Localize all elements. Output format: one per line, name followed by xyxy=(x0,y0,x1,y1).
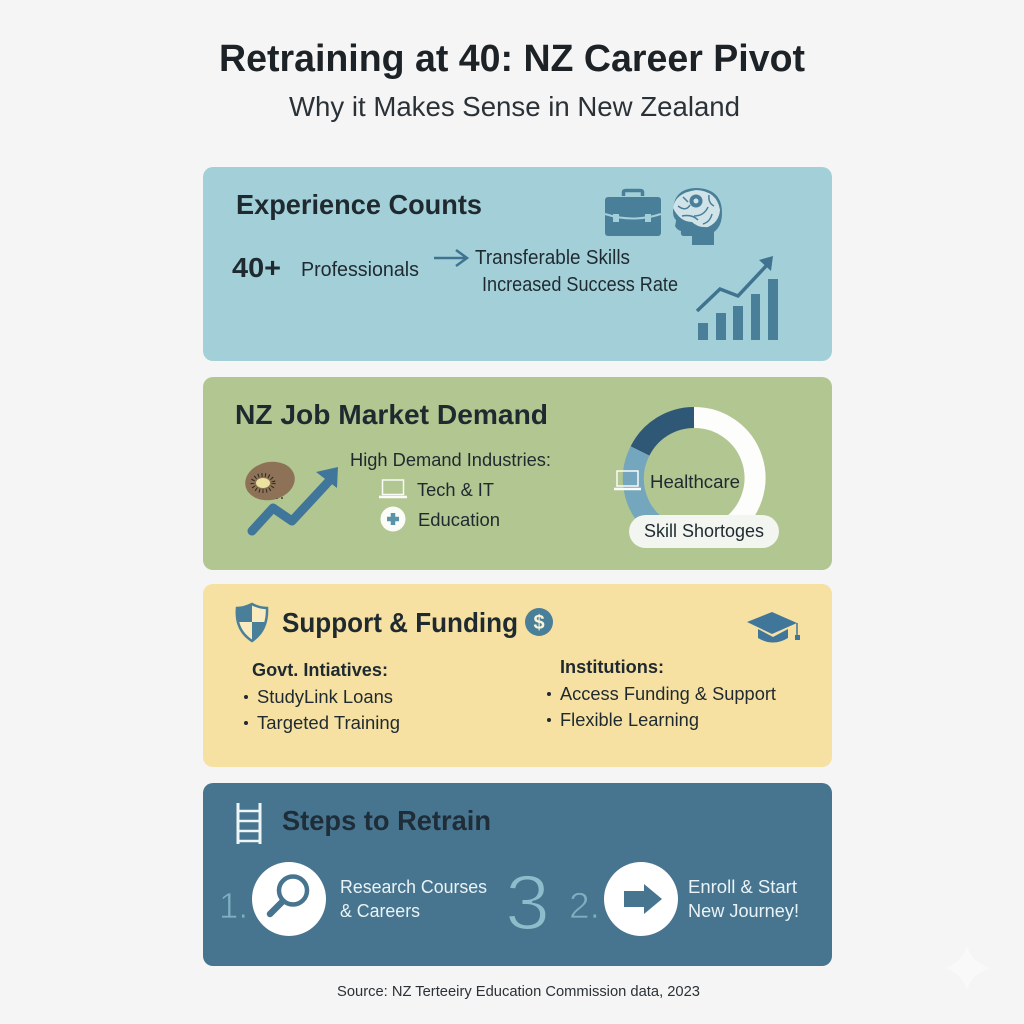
list: institutions: Institutions: xyxy=(560,656,664,677)
icon: kiwifruit xyxy=(242,457,298,505)
donut chart xyxy=(633,417,755,527)
icon: laptop small xyxy=(614,471,641,489)
list: government initiatives: StudyLink Loans xyxy=(257,686,393,707)
pill: skill shortages: Skill Shortoges xyxy=(644,520,764,541)
list: government initiatives: Targeted Training xyxy=(257,712,400,733)
label: research courses: & Careers xyxy=(340,900,420,921)
label: enroll and start xyxy=(688,876,799,921)
label: professionals: Professionals xyxy=(301,259,419,281)
step number 1: 1. xyxy=(219,885,248,926)
bar chart: rising success xyxy=(697,256,778,340)
label: enroll and start: Enroll & Start xyxy=(688,876,797,897)
arrow: professionals to skills xyxy=(434,250,467,266)
pill: skill shortages xyxy=(629,515,779,548)
list: institutions: Access Funding & Support xyxy=(560,683,776,704)
heading: job market: NZ Job Market Demand xyxy=(235,399,548,430)
list: government initiatives: Govt. Intiatives: xyxy=(252,659,388,680)
arrow: rising demand xyxy=(252,467,338,531)
panel: job market demand xyxy=(203,377,832,570)
label: transferable skills: Transferable Skills xyxy=(475,247,630,269)
heading: experience counts: Experience Counts xyxy=(236,189,482,220)
label: education: Education xyxy=(418,509,500,530)
icon: briefcase xyxy=(605,190,661,236)
panel: steps to retrain xyxy=(203,783,832,966)
label: research courses xyxy=(340,876,487,921)
step number 2: 2. xyxy=(569,885,600,926)
list: institutions: Flexible Learning xyxy=(560,709,699,730)
list: government initiatives xyxy=(244,659,400,733)
heading: steps: Steps to Retrain xyxy=(282,805,491,836)
label: tech and it: Tech & IT xyxy=(417,479,494,500)
icon: head with brain xyxy=(673,188,722,245)
icon: laptop xyxy=(379,480,407,497)
icon: ladder xyxy=(238,803,260,844)
list: institutions xyxy=(547,656,776,730)
label: increased success rate: Increased Success Rate xyxy=(482,274,678,296)
heading: support: Support & Funding xyxy=(282,607,518,638)
label: enroll and start: New Journey! xyxy=(688,900,799,921)
step number 3: 3 xyxy=(505,858,550,946)
title: Retraining at 40: NZ Career Pivot xyxy=(219,38,805,80)
label: research courses: Research Courses xyxy=(340,876,487,897)
label: healthcare: Healthcare xyxy=(650,471,740,492)
icon: dollar coin: $ xyxy=(533,612,545,634)
icon: medical plus xyxy=(380,506,406,532)
icon: forward arrow xyxy=(604,862,678,936)
subtitle: Why it Makes Sense in New Zealand xyxy=(289,91,740,122)
label: high demand industries: High Demand Industries: xyxy=(350,449,551,470)
icon: magnifier xyxy=(252,862,326,936)
panel: support and funding xyxy=(203,584,832,767)
label: 40+: 40+ xyxy=(232,252,281,283)
icon: dollar coin xyxy=(525,608,553,636)
panel: experience counts xyxy=(203,167,832,361)
source note: Source: NZ Terteeiry Education Commission data, 2023 xyxy=(337,984,700,1000)
icon: shield xyxy=(236,604,267,641)
icon: graduation cap xyxy=(747,612,800,642)
